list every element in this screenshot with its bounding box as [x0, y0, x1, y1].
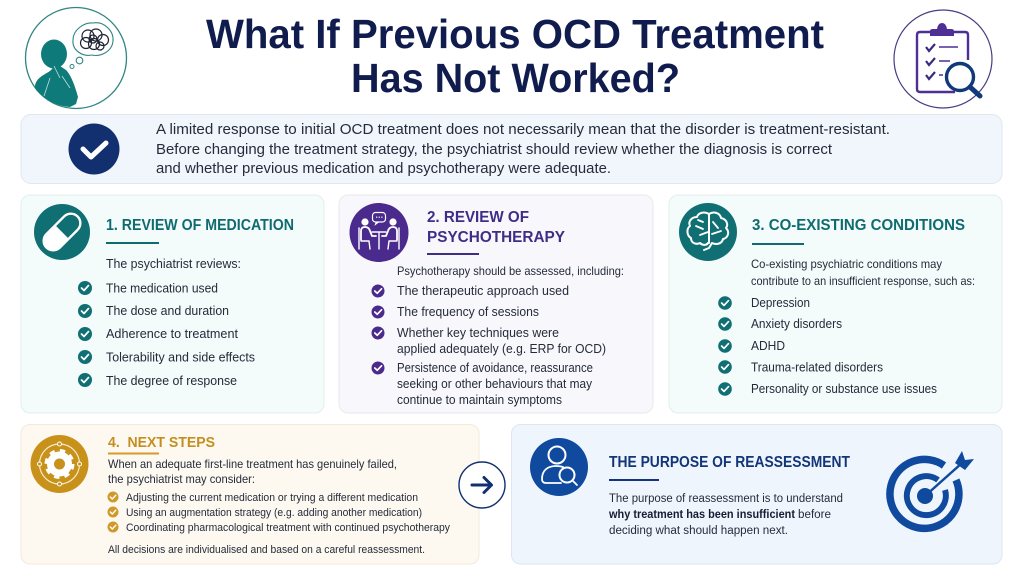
checklist: [718, 296, 937, 396]
heading: 2. REVIEW OF: [427, 209, 529, 226]
body text: why treatment has been insufficient: [608, 509, 795, 521]
checklist: Whether key techniques were: [397, 326, 559, 340]
checklist: Coordinating pharmacological treatment with continued psychotherapy: [126, 522, 450, 534]
title: What If Previous OCD Treatment: [206, 11, 824, 57]
icon: brain: [679, 203, 737, 261]
panel: intro summary: [21, 114, 1002, 184]
heading: THE PURPOSE OF REASSESSMENT: [609, 454, 850, 471]
checklist: Anxiety disorders: [751, 317, 842, 331]
lead text: When an adequate first-line treatment has genuinely failed,: [108, 457, 397, 471]
icon: person thinking with tangled thought: [26, 8, 126, 108]
checklist: continue to maintain symptoms: [397, 393, 562, 407]
panel: 4 next steps: [21, 424, 479, 564]
lead text: [751, 257, 975, 288]
checklist: Adjusting the current medication or trying a different medication: [126, 492, 418, 504]
checklist: ADHD: [751, 339, 785, 353]
heading: [427, 209, 566, 255]
heading: PSYCHOTHERAPY: [427, 229, 566, 246]
checklist: [78, 281, 255, 388]
arrow: next steps to purpose: [459, 462, 505, 508]
heading: 3. CO-EXISTING CONDITIONS: [752, 217, 965, 234]
body text: before: [798, 509, 831, 521]
icon: therapy session: [350, 203, 408, 262]
checklist: The medication used: [106, 282, 218, 296]
checklist: Using an augmentation strategy (e.g. adding another medication): [126, 507, 422, 519]
icon: target with arrow: [890, 451, 974, 528]
body text: [608, 493, 843, 537]
checklist: Persistence of avoidance, reassurance: [397, 361, 593, 375]
panel: purpose of reassessment: [512, 424, 1002, 564]
heading: 4. NEXT STEPS: [108, 434, 215, 451]
intro text: Before changing the treatment strategy, the psychiatrist should review whether the diagnosis is correct: [156, 142, 832, 158]
checklist: The dose and duration: [106, 304, 229, 318]
checklist: Tolerability and side effects: [106, 350, 255, 364]
checklist: [108, 492, 450, 534]
icon: clipboard with magnifier: [894, 10, 992, 108]
icon: person with magnifier: [530, 438, 588, 496]
lead text: The psychiatrist reviews:: [106, 257, 241, 271]
checklist: Depression: [751, 296, 810, 310]
lead text: Co-existing psychiatric conditions may: [751, 257, 942, 271]
lead text: Psychotherapy should be assessed, including:: [397, 264, 624, 278]
title: [206, 11, 824, 101]
checklist: The frequency of sessions: [397, 305, 539, 319]
intro text: A limited response to initial OCD treatment does not necessarily mean that the disorder is treatment-resistant.: [156, 122, 890, 138]
icon: capsule: [34, 204, 90, 260]
icon: gear: [30, 435, 88, 493]
checklist: Personality or substance use issues: [751, 382, 937, 396]
intro text: [156, 122, 890, 177]
checklist: The therapeutic approach used: [397, 284, 569, 298]
checklist: seeking or other behaviours that may: [397, 377, 593, 391]
heading: 1. REVIEW OF MEDICATION: [106, 217, 294, 234]
checklist: Trauma-related disorders: [751, 360, 883, 374]
checklist: Adherence to treatment: [106, 327, 239, 341]
lead text: [108, 457, 397, 486]
intro text: and whether previous medication and psychotherapy were adequate.: [156, 161, 611, 177]
icon: check badge: [68, 124, 120, 174]
checklist: [372, 284, 606, 407]
panel: 3 co-existing conditions: [669, 195, 1002, 413]
checklist: The degree of response: [106, 374, 237, 388]
body text: deciding what should happen next.: [609, 525, 788, 537]
panel: 1 review of medication: [21, 195, 324, 413]
panel: 2 review of psychotherapy: [339, 195, 653, 413]
title: Has Not Worked?: [351, 55, 680, 101]
checklist: applied adequately (e.g. ERP for OCD): [397, 342, 606, 356]
lead text: contribute to an insufficient response, such as:: [751, 274, 975, 288]
closing note: All decisions are individualised and based on a careful reassessment.: [108, 544, 425, 556]
lead text: the psychiatrist may consider:: [108, 472, 255, 486]
body text: The purpose of reassessment is to understand: [609, 493, 843, 505]
